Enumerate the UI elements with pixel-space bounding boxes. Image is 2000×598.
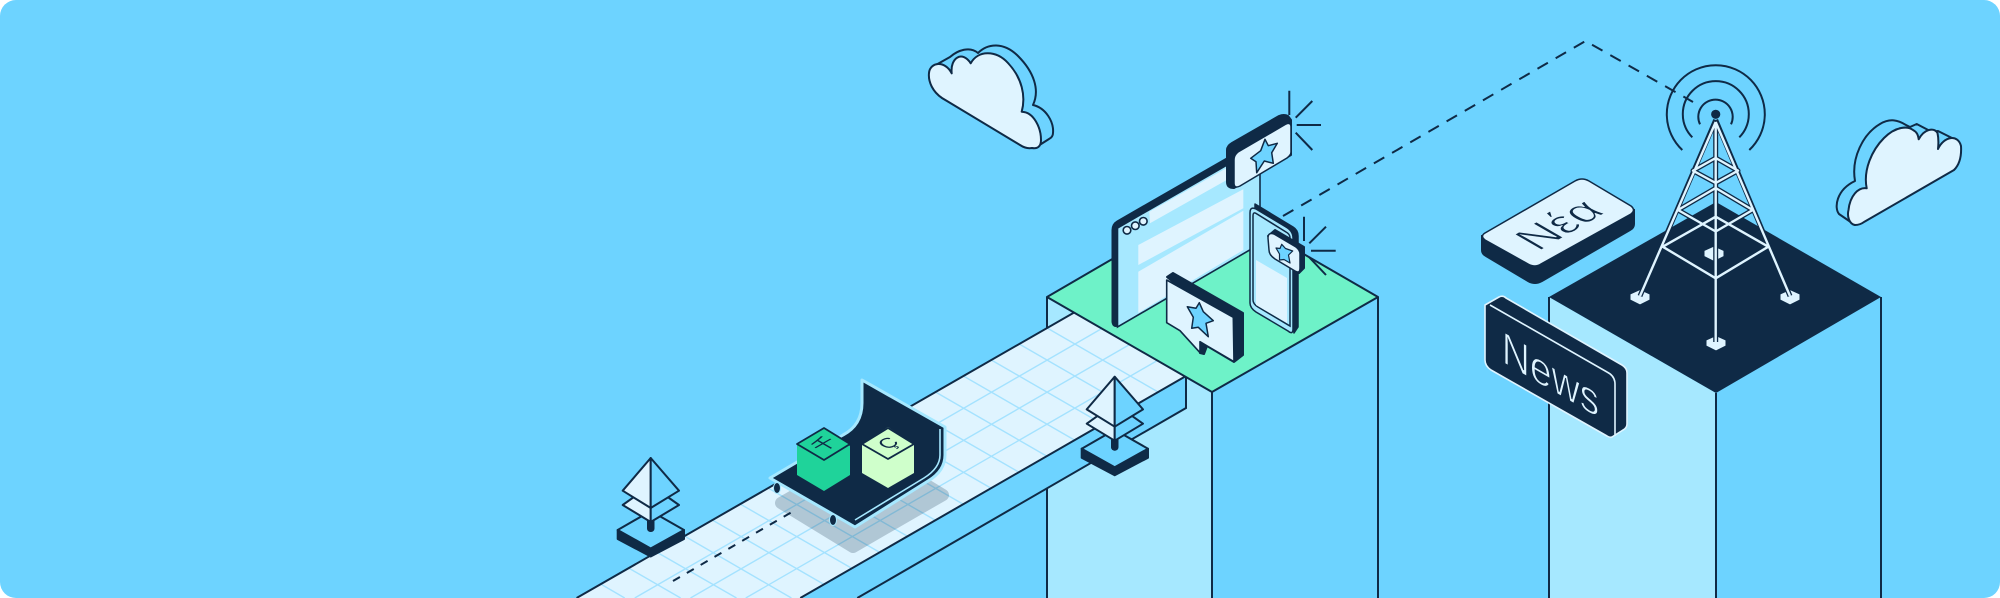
cart carrying translated boxes	[770, 380, 945, 527]
signal arcs	[1667, 65, 1765, 150]
cart wheel left	[774, 482, 780, 494]
dark column	[1549, 297, 1881, 598]
tile: Greek news label	[1482, 179, 1634, 283]
tile: News label	[1485, 296, 1627, 437]
star badge on window	[1227, 115, 1291, 188]
lime box: Ç	[873, 434, 905, 453]
lime box	[862, 427, 914, 488]
road: road deck with grid	[577, 312, 1186, 598]
dark platform top	[1549, 202, 1881, 393]
cloud: left	[929, 45, 1053, 148]
green platform top	[1047, 201, 1378, 392]
antenna tip	[1711, 110, 1720, 119]
tree: left	[618, 458, 684, 556]
tile: Greek news label: Νέα	[1503, 192, 1615, 257]
cart body	[770, 380, 945, 527]
green box	[797, 428, 850, 491]
tower lattice core	[1640, 122, 1790, 342]
cart inner edge	[855, 429, 940, 520]
cart shadow	[781, 451, 943, 547]
browser window	[1112, 140, 1260, 327]
tower footings	[1630, 246, 1800, 351]
cloud: right	[1837, 120, 1961, 225]
speech bubble with star	[1167, 273, 1243, 362]
tree: right	[1082, 377, 1148, 475]
star badge on phone	[1268, 230, 1304, 273]
radio tower	[1630, 65, 1800, 351]
cart wheel right	[830, 514, 836, 526]
tile: News label: News	[1502, 321, 1599, 428]
dashed signal line: road	[673, 509, 797, 581]
dashed signal line: phone to tower	[1283, 41, 1693, 216]
green column	[1047, 297, 1378, 598]
burst rays: phone badge	[1304, 217, 1336, 275]
phone	[1250, 204, 1298, 333]
burst rays: window badge	[1289, 91, 1321, 150]
green box: 千	[806, 433, 843, 455]
tower lattice outline	[1640, 120, 1790, 342]
window control dots	[1123, 218, 1147, 234]
